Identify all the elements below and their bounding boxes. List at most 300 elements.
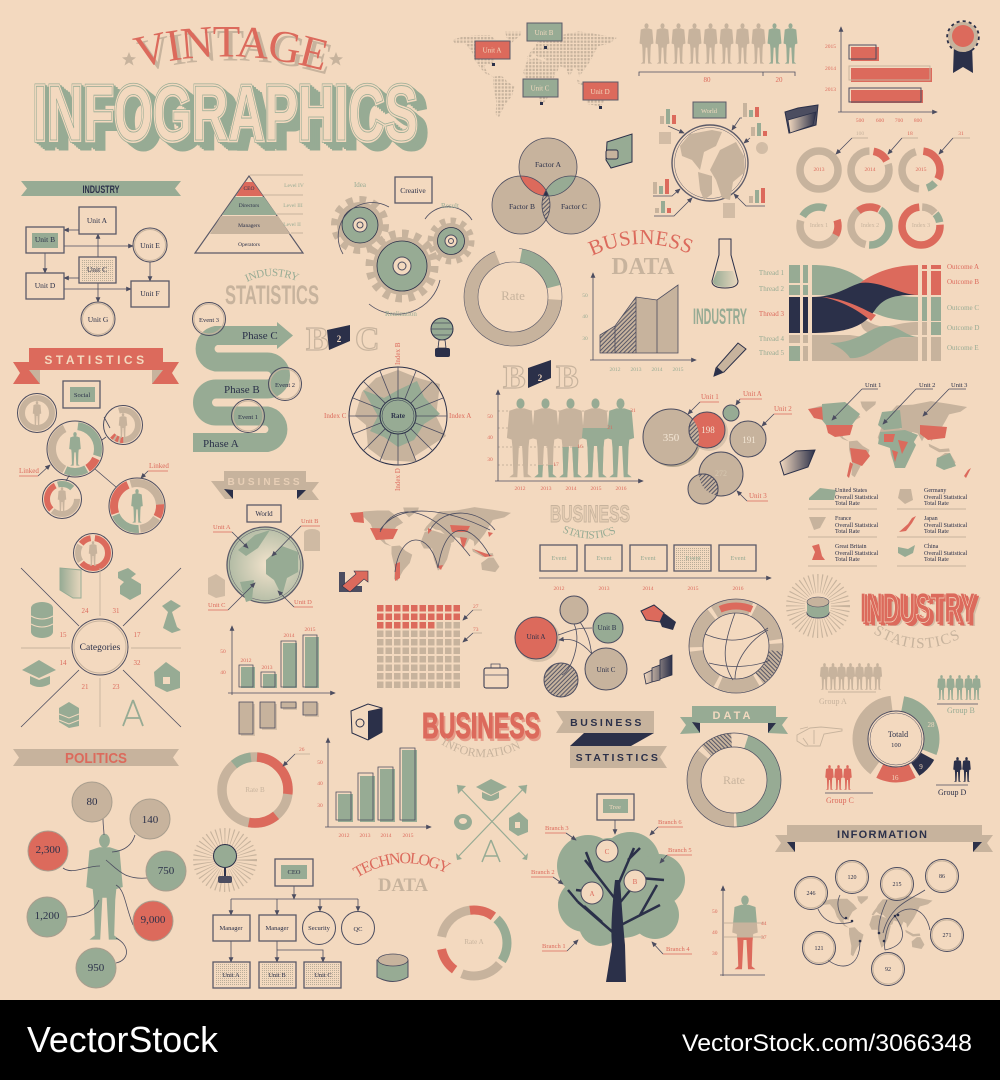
bar chart with year labels: 2015 — [304, 627, 316, 633]
ribbon: Information — [775, 825, 993, 852]
radar chart: Index C — [324, 412, 347, 420]
icon: desk globe — [431, 318, 453, 357]
bar chart 2012-2015: 40 — [317, 781, 323, 787]
value 1,200: 1,200 — [35, 910, 60, 922]
node C: C — [605, 848, 610, 856]
men bar chart — [487, 390, 643, 492]
Rate A arrow donut — [441, 910, 507, 976]
radar chart: Index B — [394, 342, 402, 365]
mini bars — [660, 109, 676, 124]
B2C emblem — [306, 321, 380, 358]
infographic canvas: INDUSTRY — [693, 304, 747, 329]
donut node — [18, 394, 56, 432]
CEO box: CEO — [288, 869, 301, 876]
serpentine phase diagram: Phase C — [242, 330, 278, 342]
event 3: Event 3 — [199, 317, 219, 324]
event 1 — [232, 400, 264, 432]
men bar chart: 2014 — [566, 486, 577, 492]
statistical world map: Unit 1 — [865, 382, 881, 389]
Japan: Japan — [924, 516, 938, 522]
index donuts — [800, 207, 940, 245]
tree diagram: Branch 5 — [668, 847, 692, 854]
pyramid chart: Directors — [239, 203, 259, 209]
bubble network: Unit C — [597, 666, 616, 674]
sankey diagram: Thread 2 — [759, 285, 784, 293]
categories wheel: 32 — [134, 659, 141, 667]
China: Total Rate — [924, 557, 949, 563]
title: Infographics: INFOGRAPHICS — [33, 69, 418, 157]
bubble chart: Unit 3 — [749, 492, 767, 500]
mini bars — [749, 188, 765, 203]
security node — [302, 912, 336, 944]
unit F box: Unit F — [140, 289, 160, 298]
value 950: 950 — [88, 962, 105, 974]
CEO box — [275, 859, 313, 886]
manager box — [213, 915, 250, 941]
ribbon: Data: DATA — [713, 710, 753, 722]
node C — [596, 840, 618, 862]
categories wheel: 23 — [112, 683, 120, 691]
footer band: VectorStock — [27, 1019, 219, 1060]
event timeline: 2014 — [642, 586, 654, 592]
gear: realization — [370, 234, 434, 298]
small tan icons — [659, 132, 768, 218]
area chart: 40 — [582, 314, 588, 320]
tree diagram: Branch 1 — [542, 943, 566, 950]
heading: Business Statistics — [550, 501, 630, 539]
QC node: QC — [353, 926, 363, 933]
heading: Technology Data: TECHNOLOGY — [352, 852, 452, 877]
icon: wallet — [60, 568, 81, 598]
tree diagram: Branch 4 — [666, 946, 690, 953]
chord ring — [689, 599, 783, 693]
event 2013 — [585, 545, 622, 571]
value 9,000 — [133, 901, 173, 941]
ribbon: Statistics — [13, 348, 179, 384]
unit G node: Unit G — [88, 315, 109, 324]
sunburst desk globe — [204, 839, 246, 883]
men bar chart: 2012 — [514, 486, 526, 492]
categories wheel — [21, 568, 181, 728]
sunburst pie icon — [797, 585, 839, 627]
flight route map — [350, 507, 511, 581]
Rate A arrow donut: Rate A — [464, 938, 484, 946]
icon: coins — [304, 529, 320, 551]
men bar chart: 17 — [553, 462, 559, 468]
icon: stacked blocks — [644, 655, 672, 684]
icon: hourglass — [162, 600, 181, 633]
group pictograms — [820, 663, 981, 790]
icon: compass — [482, 840, 500, 862]
bar chart 2012-2015: 30 — [317, 803, 323, 809]
tree tag — [597, 794, 634, 820]
unit A box — [79, 207, 116, 234]
radar chart: Rate — [391, 412, 405, 420]
event 2015 — [674, 545, 711, 571]
China — [898, 544, 967, 563]
men bar chart: 2013 — [540, 486, 552, 492]
tree diagram — [531, 794, 692, 982]
Germany: Germany — [924, 488, 946, 494]
men bar chart: 2015 — [590, 486, 602, 492]
event 2014: Event — [640, 555, 656, 562]
radar chart — [324, 342, 471, 491]
B2B emblem: B — [503, 359, 526, 396]
title: Infographics: INFOGRAPHICS — [33, 69, 418, 157]
China: Overall Statistical — [924, 551, 967, 557]
B2C emblem: 2 — [337, 334, 342, 344]
unit C box — [304, 962, 341, 988]
area chart: 2015 — [672, 367, 684, 373]
node B: B — [633, 878, 638, 886]
sankey diagram: Outcome A — [947, 263, 979, 271]
heading: Business Data: DATA — [612, 254, 675, 280]
flowchart — [26, 207, 169, 336]
title: Infographics: INFOGRAPHICS — [35, 71, 420, 159]
sankey diagram: Outcome E — [947, 344, 979, 352]
B2C emblem: C — [355, 321, 380, 358]
man metric chart: 37 — [761, 935, 767, 941]
tree tag: Tree — [609, 804, 621, 811]
heading: Industry Statistics: STATISTICS — [225, 280, 319, 310]
event 3 — [192, 302, 226, 336]
bubble 271: 271 — [942, 933, 952, 939]
area chart: 2014 — [652, 367, 663, 373]
year donuts: 31 — [958, 131, 964, 137]
B2B emblem: B — [556, 359, 579, 396]
heading: Business: BUSINESS — [422, 705, 540, 746]
man metric chart — [712, 886, 767, 976]
value 80 — [72, 782, 112, 822]
unit C box: Unit C — [87, 265, 107, 274]
B2B emblem — [503, 359, 579, 396]
bubble network: Unit B — [598, 624, 617, 632]
ribbon: Information: INFORMATION — [837, 829, 927, 841]
index donuts: Index 3 — [912, 223, 930, 229]
tree diagram: Branch 6 — [658, 819, 682, 826]
title: Infographics: INFOGRAPHICS — [37, 72, 422, 160]
United States: Total Rate — [835, 501, 860, 507]
mini bars — [751, 123, 767, 136]
Great Britain: Great Britain — [835, 544, 866, 550]
donut node — [42, 480, 82, 518]
men bar chart: 21 — [607, 425, 613, 431]
tree diagram: Branch 2 — [531, 869, 555, 876]
Great Britain: Overall Statistical — [835, 551, 878, 557]
icon: gold bar — [780, 450, 815, 475]
value 9,000: 9,000 — [141, 914, 166, 926]
unit E node: Unit E — [140, 241, 160, 250]
bubble 271 — [930, 918, 964, 952]
bubble 86: 86 — [939, 874, 945, 880]
icon: pencil — [714, 343, 746, 376]
data Rate donut — [687, 733, 781, 827]
Germany: Total Rate — [924, 501, 949, 507]
sankey diagram: Thread 5 — [759, 349, 784, 357]
manager box: Manager — [219, 925, 243, 932]
men bar chart: 30 — [487, 457, 493, 463]
ribbon: Industry — [21, 181, 181, 196]
year donuts: 2014 — [864, 167, 876, 173]
dotted world map with units — [453, 23, 618, 117]
bar chart with year labels: 2013 — [262, 665, 273, 671]
icon: safe — [351, 704, 382, 740]
bubble chart: Unit 2 — [774, 405, 792, 413]
gears diagram: Realization — [385, 310, 417, 318]
horizontal bar chart: 800 — [914, 118, 922, 124]
categories wheel: 21 — [82, 683, 89, 691]
bar chart 2012-2015 — [317, 738, 431, 839]
icon: books — [59, 702, 79, 728]
unit B box — [26, 227, 64, 253]
group donut: Totald — [888, 730, 908, 739]
Germany — [898, 488, 967, 507]
bubble 246 — [794, 876, 828, 910]
event 2 — [268, 368, 302, 400]
manager box — [259, 915, 296, 941]
pyramid chart: Level III — [283, 203, 303, 209]
bar chart with year labels: 40 — [220, 670, 226, 676]
group donut: 100 — [891, 742, 901, 749]
bubble chart: Unit 1 — [701, 393, 719, 401]
year donuts: 2013 — [814, 167, 825, 173]
bubble 121 — [802, 932, 836, 964]
waffle chart: 73 — [473, 627, 479, 633]
sankey diagram: Thread 4 — [759, 335, 784, 343]
event 2015: Event — [685, 555, 701, 562]
heading: Information: INFORMATION — [442, 738, 520, 758]
large donut node — [109, 478, 165, 534]
pyramid chart: Level IV — [284, 183, 304, 189]
event 2014 — [630, 545, 667, 571]
unit A box: Unit A — [87, 216, 108, 225]
icon: flask — [712, 239, 738, 288]
bubble 120 — [836, 860, 868, 894]
radar chart: Index D — [394, 468, 402, 491]
unit B tag — [527, 23, 562, 49]
heading: Business Data: BUSINESS — [587, 230, 693, 256]
area chart: 30 — [582, 336, 588, 342]
radar chart: Index A — [449, 412, 471, 420]
statistical world map — [808, 382, 971, 478]
France — [809, 516, 878, 535]
gears diagram: Result — [441, 202, 459, 210]
bar chart with year labels: 2014 — [284, 633, 295, 639]
group donut — [819, 692, 978, 805]
heading: Industry Statistics — [225, 268, 319, 310]
ribbon: Data — [680, 706, 788, 734]
ribbon: Business: BUSINESS — [227, 477, 303, 488]
index donuts: Index 2 — [861, 223, 879, 229]
categories wheel: 24 — [82, 607, 89, 615]
earth globe with units: Unit C — [208, 602, 226, 609]
icon: blocks — [208, 574, 225, 598]
bubble chart — [643, 390, 792, 504]
politics figure with value bubbles — [27, 782, 186, 988]
security node: Security — [308, 925, 331, 932]
heading: Technology Data — [352, 852, 452, 896]
Japan: Total Rate — [924, 529, 949, 535]
icon: cylinder pie — [377, 954, 408, 982]
value 140: 140 — [142, 814, 159, 826]
statistical world map: Unit 2 — [919, 382, 935, 389]
heading: Business Statistics: STATISTICS — [563, 526, 615, 539]
bar chart 2012-2015: 50 — [317, 760, 323, 766]
Venn diagram — [492, 138, 600, 234]
United States: Overall Statistical — [835, 495, 878, 501]
area chart — [582, 273, 696, 373]
icon: briefcase — [484, 664, 508, 688]
men bar chart: 50 — [487, 414, 493, 420]
event 1: Event 1 — [238, 414, 258, 421]
group donut: Group B — [947, 706, 975, 715]
horizontal bar chart: 700 — [895, 118, 903, 124]
social network donuts: Linked — [149, 462, 169, 470]
title: Infographics — [33, 69, 428, 165]
unit D box: Unit D — [35, 281, 56, 290]
social box: Social — [74, 392, 90, 399]
data Rate donut: Rate — [723, 773, 745, 787]
title: Infographics: INFOGRAPHICS — [33, 69, 418, 157]
event timeline: 2012 — [554, 586, 565, 592]
horizontal bar chart: 500 — [856, 118, 864, 124]
unit C box: Unit C — [314, 972, 332, 979]
icon: coins — [31, 602, 53, 638]
Germany: Overall Statistical — [924, 495, 967, 501]
horizontal bar chart: 2013 — [825, 87, 836, 93]
unit B tag: Unit B — [535, 29, 554, 37]
title: Vintage: VINTAGE — [132, 26, 327, 70]
bubble chart: Unit A — [743, 390, 762, 398]
event timeline: 2015 — [688, 586, 699, 592]
pictogram: 80 / 20 men — [639, 23, 797, 84]
bubble 86 — [926, 860, 958, 892]
area chart: 50 — [582, 293, 588, 299]
horizontal bar chart: 2015 — [825, 44, 836, 50]
man metric chart: 30 — [712, 951, 718, 957]
men bar chart: 40 — [487, 435, 493, 441]
bar chart with year labels: 50 — [220, 649, 226, 655]
group donut: Group A — [819, 697, 847, 706]
Rate B donut: 26 — [299, 747, 305, 753]
event 2016: Event — [730, 555, 746, 562]
icon: graduation cap — [476, 779, 507, 801]
year donuts: 18 — [907, 131, 913, 137]
bubble 215 — [880, 868, 914, 900]
bar chart 2012-2015: 2015 — [402, 833, 414, 839]
unit C tag: Unit C — [531, 84, 550, 92]
event timeline: 2013 — [598, 586, 610, 592]
icon: house — [154, 662, 180, 692]
unit B box: Unit B — [268, 972, 286, 979]
B2C emblem: B — [306, 321, 329, 358]
horizontal bar chart: 2014 — [825, 66, 836, 72]
group donut: Group D — [938, 788, 966, 797]
node A — [581, 882, 603, 904]
event 2016 — [719, 545, 756, 571]
bubble 215: 215 — [892, 882, 902, 888]
Venn diagram: Factor C — [561, 202, 587, 211]
unit A box: Unit A — [222, 972, 240, 979]
unit D tag: Unit D — [590, 88, 610, 96]
creative box: Creative — [400, 186, 426, 195]
serpentine phase diagram: Phase B — [224, 384, 260, 396]
United States: United States — [835, 488, 868, 494]
United States — [809, 488, 878, 507]
mini bars — [743, 103, 759, 117]
unit B box — [259, 962, 296, 988]
title: Infographics: INFOGRAPHICS — [39, 74, 424, 162]
France: Overall Statistical — [835, 523, 878, 529]
node A: A — [589, 890, 595, 898]
heading: Industry Statistics: INDUSTRY — [244, 268, 300, 282]
group donut: 28 — [928, 721, 935, 729]
big Rate donut — [464, 248, 562, 346]
unit A tag — [475, 41, 510, 66]
categories wheel: Categories — [80, 643, 121, 653]
group donut: 9 — [919, 763, 923, 771]
icon: house — [509, 812, 528, 836]
footer band: VectorStock.com/3066348 — [682, 1030, 972, 1057]
icon: pointing hand — [797, 727, 842, 746]
categories wheel: 17 — [134, 631, 141, 639]
earth globe with units: Unit D — [294, 599, 312, 606]
bubble chart: 350 — [663, 432, 680, 444]
Rate B donut — [222, 747, 310, 823]
crossed arrows emblem — [454, 779, 528, 862]
statistical world map: Unit 3 — [951, 382, 967, 389]
area chart: 2012 — [610, 367, 621, 373]
event 2: Event 2 — [275, 382, 295, 389]
sankey diagram: Outcome B — [947, 278, 979, 286]
value 750 — [146, 851, 186, 891]
Japan: Overall Statistical — [924, 523, 967, 529]
sankey diagram: Outcome D — [947, 324, 979, 332]
unit G node — [81, 302, 115, 336]
unit A box — [213, 962, 250, 988]
event 2013: Event — [596, 555, 612, 562]
man metric chart: 40 — [712, 930, 718, 936]
pyramid chart: Operators — [238, 242, 260, 248]
men bar chart: 2016 — [616, 486, 627, 492]
France: France — [835, 516, 852, 522]
country legend — [808, 488, 967, 566]
index donuts: Index 1 — [810, 223, 828, 229]
unit B box: Unit B — [35, 235, 55, 244]
bubble chart: 272 — [715, 469, 727, 478]
unit C tag — [523, 79, 558, 105]
earth globe with units: Unit A — [213, 524, 231, 531]
ribbon: Statistics: STATISTICS — [44, 353, 148, 367]
heading: Business Statistics: BUSINESS — [550, 501, 630, 528]
unit D tag — [583, 82, 618, 109]
social network donuts — [18, 381, 169, 572]
bubble network — [515, 596, 627, 697]
world globe with bar charts — [653, 102, 768, 218]
social network donuts: Linked — [19, 467, 39, 475]
bubble 92: 92 — [885, 967, 891, 973]
value 140 — [130, 799, 170, 839]
bar chart 2012-2015: 2012 — [338, 833, 350, 839]
group donut: 16 — [892, 774, 899, 782]
heading: Business Data — [587, 230, 693, 280]
serpentine phase diagram: Phase A — [203, 438, 239, 450]
bubble 92 — [872, 952, 904, 986]
mini bars — [653, 179, 669, 194]
group donut: 47 — [856, 723, 863, 731]
tree diagram: Branch 3 — [545, 825, 569, 832]
Venn diagram: Factor B — [509, 202, 535, 211]
